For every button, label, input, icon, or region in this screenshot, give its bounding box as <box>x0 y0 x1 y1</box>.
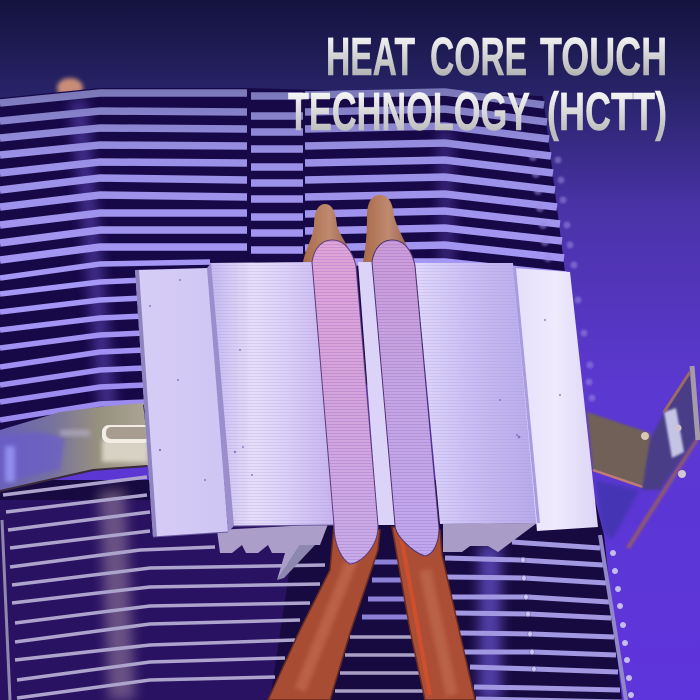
lower fin stack backing <box>0 480 622 700</box>
heat sink teeth under base <box>217 523 537 580</box>
upper fins: left section <box>0 93 303 260</box>
lower left rail <box>2 520 10 700</box>
copper pipe caps <box>303 195 414 265</box>
lower fins: left rows <box>3 477 325 698</box>
blurred light bands on fins <box>78 100 490 700</box>
title line 2: TECHNOLOGY <box>288 82 530 142</box>
upper edge dots <box>529 153 596 402</box>
copper heat pipe left, lower <box>268 525 380 700</box>
title line 1 <box>326 27 667 87</box>
blurred copper glow behind fins <box>57 78 83 98</box>
lower fins: centre and right rows <box>335 542 622 700</box>
flattened heat pipe left <box>312 240 378 564</box>
upper fin stack backing <box>0 88 566 430</box>
flattened heat pipe right <box>372 240 439 556</box>
aluminium base block <box>135 262 598 537</box>
title <box>288 27 667 142</box>
left mounting bracket <box>0 403 150 491</box>
lower right rail and dots <box>600 535 634 700</box>
right mounting bracket <box>587 366 700 548</box>
upper fins: right section <box>305 92 566 275</box>
title line 1: CORE <box>430 27 527 87</box>
upper fins: lower left rows <box>0 262 210 420</box>
lower fin knobs <box>520 558 536 672</box>
copper heat pipe right, lower <box>392 527 475 700</box>
upper fin backing left of base <box>0 260 220 430</box>
title line 1: HEAT <box>326 27 415 87</box>
